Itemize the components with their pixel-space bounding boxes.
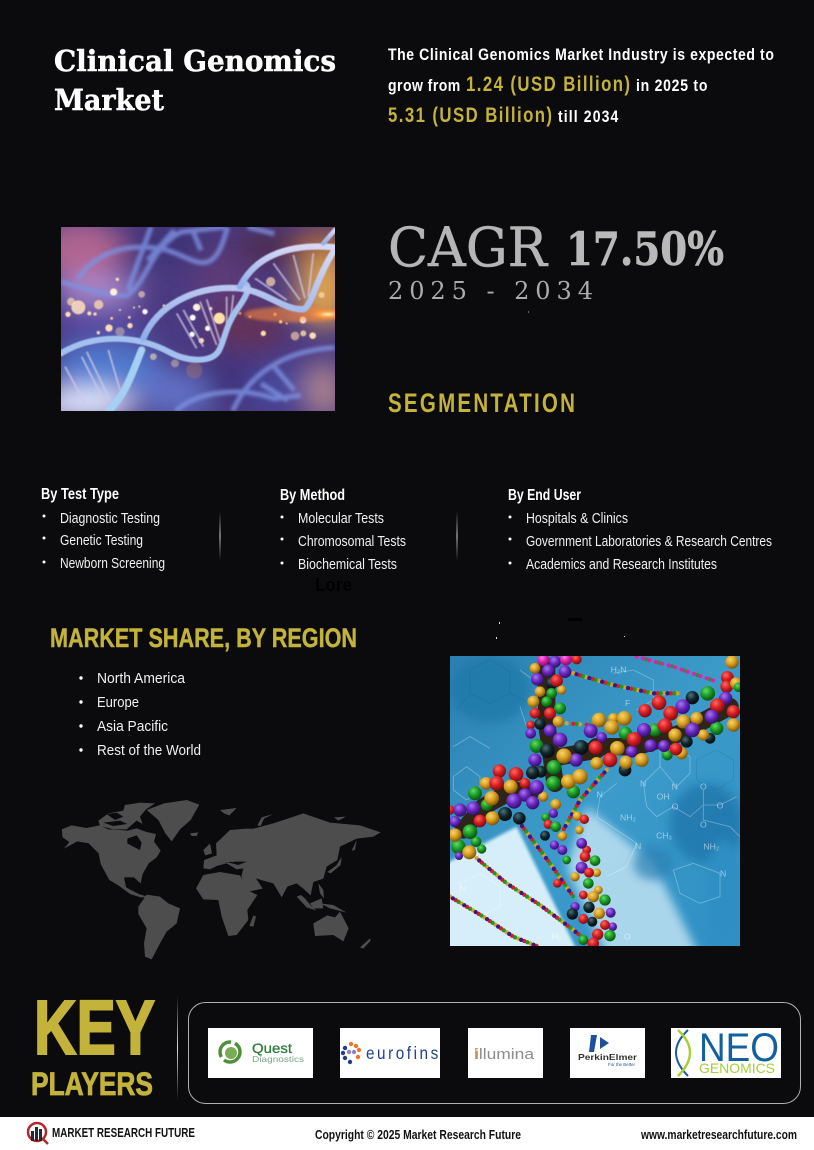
footer bar xyxy=(0,1117,814,1150)
soft colour washes xyxy=(61,227,335,411)
region list: North America xyxy=(97,670,186,687)
market forecast text xyxy=(388,46,774,128)
chemistry labels: N xyxy=(672,781,678,791)
background blurred strands xyxy=(61,227,335,411)
segment column: by method: Chromosomal Tests xyxy=(298,534,406,550)
segment column: by method: Molecular Tests xyxy=(298,511,384,527)
segment column: by end user: Academics and Research Institutes xyxy=(526,557,717,573)
small bead strands xyxy=(450,657,717,946)
market forecast text: grow from xyxy=(388,77,460,95)
CAGR value: CAGR xyxy=(388,216,548,279)
key players heading xyxy=(31,985,155,1102)
balls: left arm xyxy=(445,764,539,860)
image: colourful ball-model DNA on blue chemistry background xyxy=(440,653,743,957)
chemistry labels: NH₂ xyxy=(703,841,719,851)
market share heading: MARKET SHARE, BY REGION xyxy=(50,623,357,653)
region list: Europe xyxy=(97,694,139,711)
market forecast text: in 2025 to xyxy=(636,77,707,95)
logo: NeoGenomics: GENOMICS xyxy=(699,1060,775,1076)
segment column: by test type: By Test Type xyxy=(41,486,119,503)
segment column: by test type: Diagnostic Testing xyxy=(60,511,160,527)
chemistry labels: N xyxy=(597,789,603,799)
cluster shadow fill xyxy=(463,667,730,830)
orange light flare xyxy=(244,306,344,322)
title xyxy=(54,44,336,117)
logo: NeoGenomics xyxy=(671,1026,781,1078)
chemistry labels: N xyxy=(635,841,641,851)
main helix rungs xyxy=(65,253,313,403)
chemistry labels: O xyxy=(672,801,679,811)
logo: Quest Diagnostics xyxy=(208,1028,313,1078)
chemistry labels: OH xyxy=(657,791,670,801)
logo: NeoGenomics: NEO xyxy=(699,1026,779,1070)
chemistry labels: O xyxy=(624,931,631,941)
particles band xyxy=(65,277,325,378)
segment column: by method xyxy=(280,487,406,573)
logo: illumina: illumina xyxy=(475,1046,535,1063)
chemistry labels: O xyxy=(717,800,724,810)
CAGR value xyxy=(388,216,724,305)
balls: top column xyxy=(525,653,588,802)
segment column: by test type: Newborn Screening xyxy=(60,556,165,572)
hidden dark text: Lore xyxy=(315,575,352,595)
copyright: Copyright © 2025 Market Research Future xyxy=(315,1128,521,1142)
region list xyxy=(79,670,201,759)
logo: eurofins xyxy=(340,1028,440,1078)
world map xyxy=(62,800,381,959)
chemistry labels: H₂N xyxy=(611,665,627,675)
segment column: by test type xyxy=(41,486,165,572)
chemistry labels: H₂ xyxy=(552,931,561,941)
logo: Market Research Future: MARKET RESEARCH FUTURE xyxy=(52,1126,195,1140)
chemistry labels: O xyxy=(700,781,707,791)
chemistry labels: N xyxy=(640,779,646,789)
segment column: by method: Biochemical Tests xyxy=(298,557,397,573)
logo: PerkinElmer: For the Better xyxy=(608,1062,635,1067)
region list: Asia Pacific xyxy=(97,718,168,735)
logo: PerkinElmer xyxy=(570,1028,645,1078)
logo: Market Research Future xyxy=(28,1123,195,1144)
market forecast text: till 2034 xyxy=(558,108,619,126)
logo: illumina xyxy=(468,1028,543,1078)
chemistry labels xyxy=(460,665,726,941)
chemistry labels: O xyxy=(700,819,707,829)
region list: Rest of the World xyxy=(97,742,201,759)
logo: Quest Diagnostics: Quest xyxy=(252,1041,292,1056)
segment column: by test type: Genetic Testing xyxy=(60,533,143,549)
market forecast text: 5.31 (USD Billion) xyxy=(388,104,552,128)
CAGR value: 17.50% xyxy=(566,222,724,276)
title: Market xyxy=(54,83,165,117)
chemistry labels: N xyxy=(720,869,726,879)
chemical formula lines xyxy=(453,670,740,917)
balls: lower column xyxy=(540,799,617,949)
CAGR value: 2025 - 2034 xyxy=(388,277,593,305)
segmentation heading: SEGMENTATION xyxy=(388,388,575,419)
market forecast text: The Clinical Genomics Market Industry is expected to xyxy=(388,46,774,64)
image: DNA helix with glowing particles xyxy=(61,227,335,411)
chemistry labels: CH₃ xyxy=(656,831,673,841)
segment column: by end user: Hospitals & Clinics xyxy=(526,511,628,527)
logo: Quest Diagnostics: Diagnostics xyxy=(252,1054,304,1064)
logo: eurofins: eurofins xyxy=(366,1043,438,1063)
market forecast text: 1.24 (USD Billion) xyxy=(466,73,630,97)
title: Clinical Genomics xyxy=(54,44,336,78)
chemistry labels: N xyxy=(460,884,466,894)
chemistry labels: NH₂ xyxy=(620,813,636,823)
chemistry labels: F xyxy=(625,698,630,708)
key players panel xyxy=(188,1002,800,1104)
main helix strands xyxy=(61,230,335,411)
segment column: by method: By Method xyxy=(280,487,345,504)
segment column: by end user: By End User xyxy=(508,487,581,504)
key players heading: PLAYERS xyxy=(31,1066,153,1102)
balls: right arm xyxy=(584,655,743,776)
key players heading: KEY xyxy=(34,985,155,1071)
logo: PerkinElmer: PerkinElmer xyxy=(578,1052,638,1062)
segment column: by end user xyxy=(508,487,772,573)
